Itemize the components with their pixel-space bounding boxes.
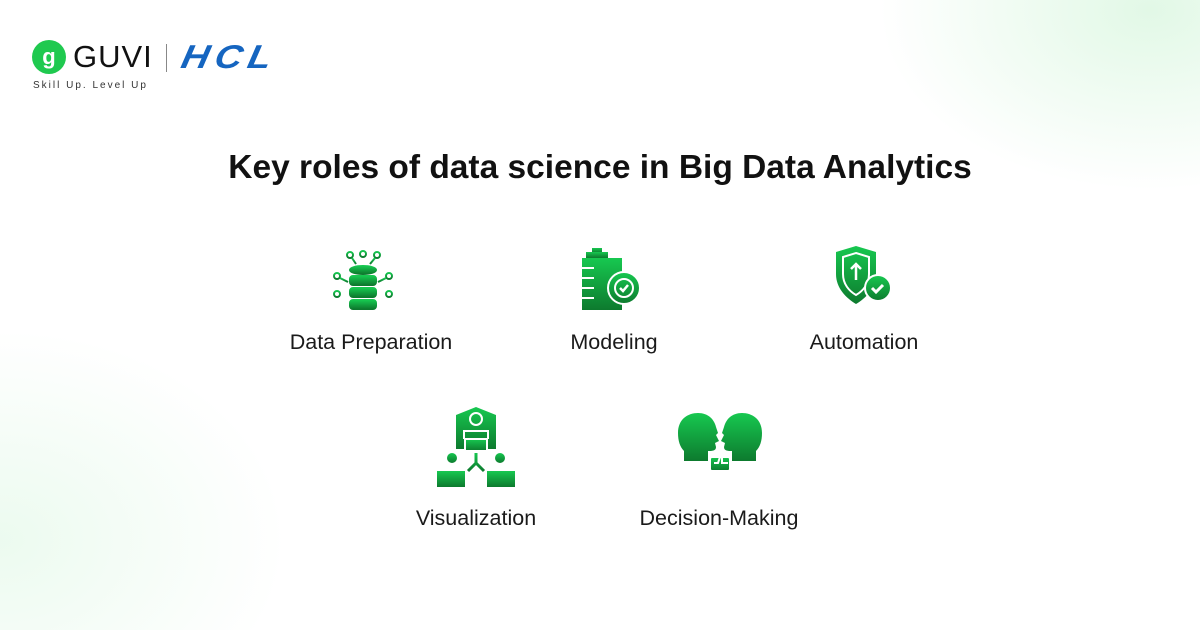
title: Key roles of data science in Big Data Analytics [228,149,972,186]
label: modeling: Modeling [570,330,658,354]
icon: database [333,250,393,310]
logo [32,38,281,91]
hcl wordmark: HCL [178,38,281,75]
icon: heads thumbs up [678,413,762,470]
icon: guvi circle: g [42,44,56,69]
icon: team hierarchy [437,407,515,487]
guvi wordmark: GUVI [73,39,153,74]
icon: clipboard gear [582,248,639,310]
label: automation: Automation [810,330,918,354]
label: visualization: Visualization [416,506,536,530]
label: decision-making: Decision-Making [640,506,798,530]
label: data preparation: Data Preparation [290,330,452,354]
icon: shield [836,246,890,304]
tagline: Skill Up. Level Up [33,80,148,91]
icon: guvi circle [32,40,66,74]
